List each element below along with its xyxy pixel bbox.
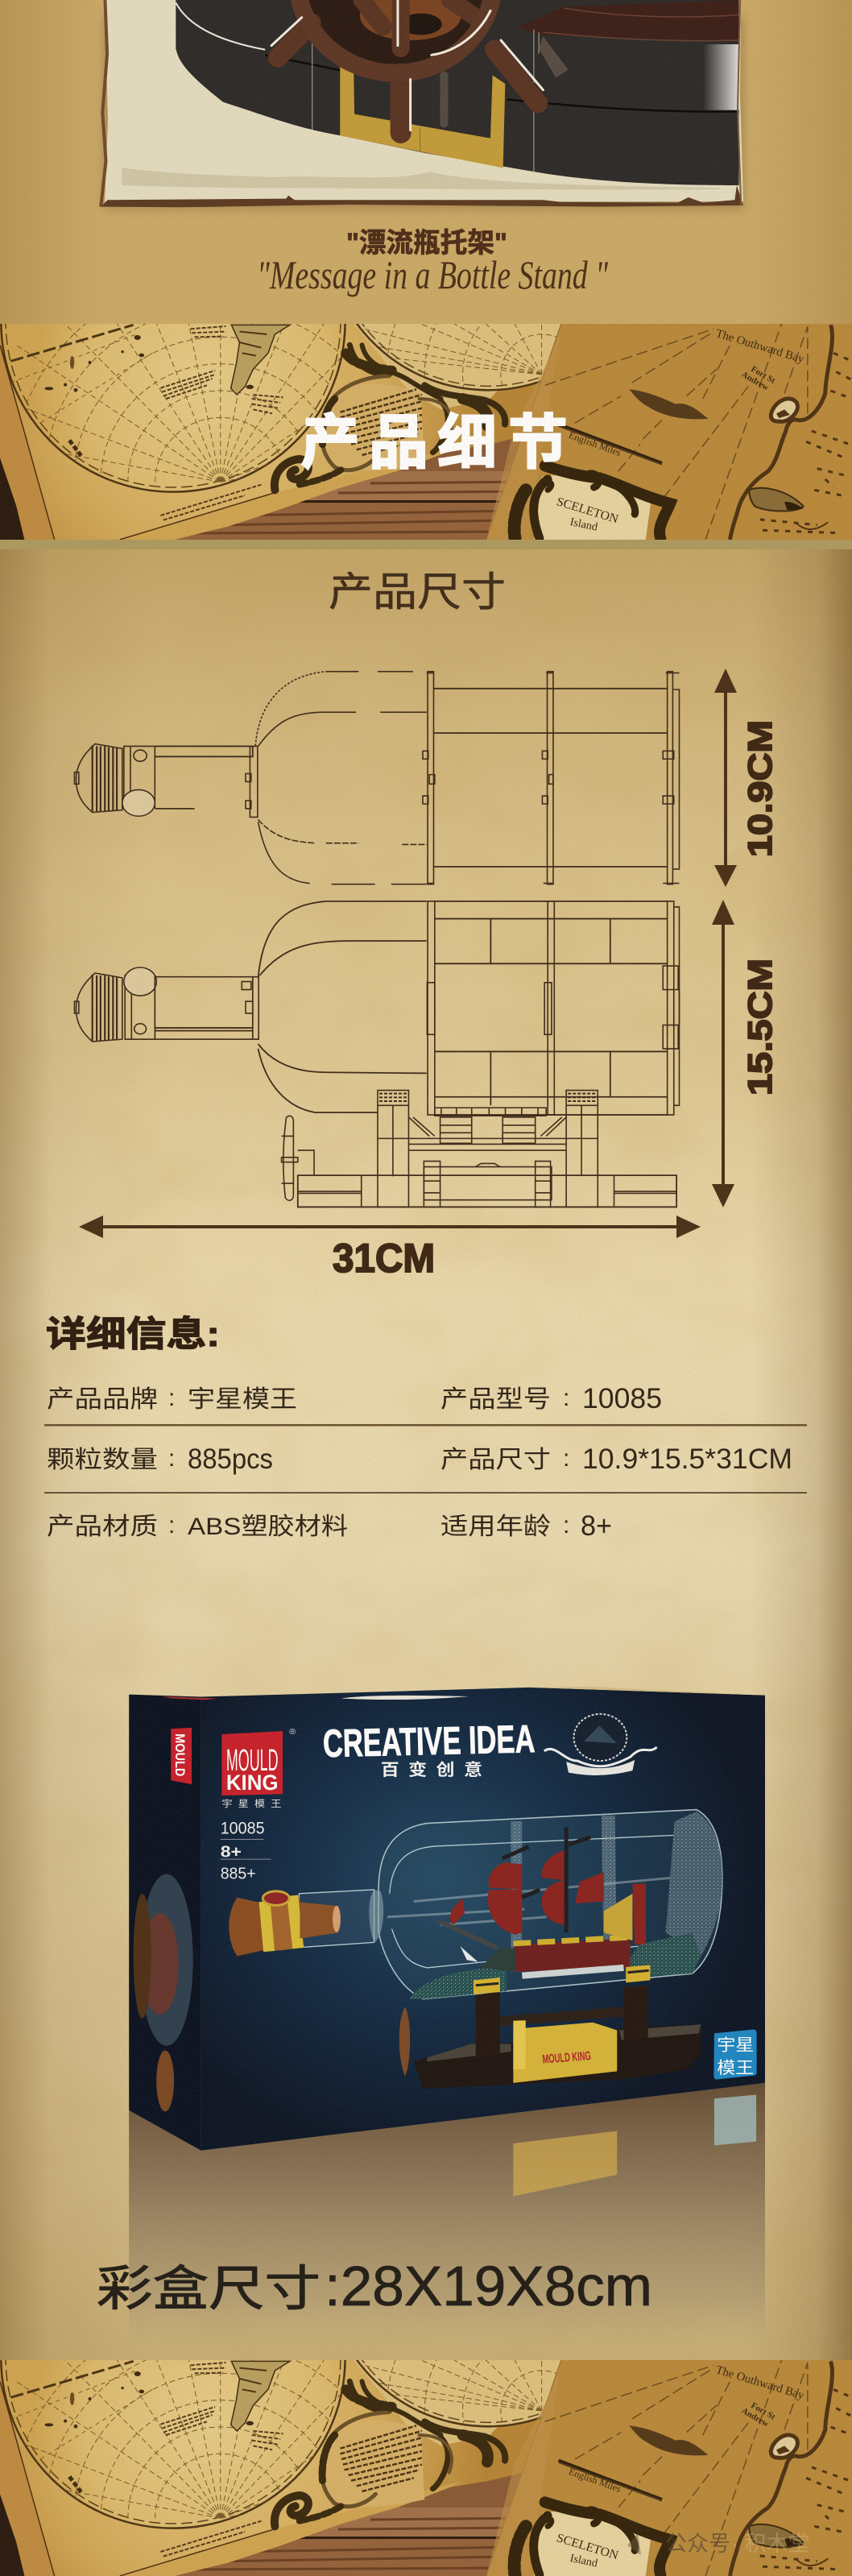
- banner: antique maps with section title: Andrew: [740, 370, 771, 393]
- stand base body: [176, 0, 739, 185]
- section title: 细: [437, 409, 497, 476]
- banner: bottom antique maps: Fort St: [749, 2400, 777, 2422]
- row 1: 产品品牌: [47, 1386, 158, 1413]
- panel: stand illustration paper: [101, 0, 744, 209]
- hull: [513, 1939, 631, 1972]
- caption: Chinese stand name: "漂流瓶托架": [346, 228, 507, 259]
- brand logo: ®: [289, 1729, 296, 1737]
- section title: 节: [508, 409, 568, 476]
- watermark: · 积木堂: [731, 2532, 810, 2556]
- arrow: vertical lower: [712, 900, 734, 1207]
- background: sand side shading: [0, 0, 852, 324]
- heading: detailed information: 详细信息:: [46, 1315, 220, 1354]
- row 1: 10085: [582, 1383, 662, 1414]
- product box photo: [129, 1687, 765, 2352]
- banner: antique maps with section title: Fort St: [749, 364, 777, 386]
- brand tag: [713, 2029, 757, 2080]
- top view of bottle: [74, 672, 680, 884]
- ship wheel: [271, 0, 543, 133]
- bottle stand: [399, 1965, 701, 2089]
- banner: antique maps with section title: [0, 72, 852, 540]
- product specs: 10085: [221, 1818, 265, 1837]
- label: 31CM: 31CM: [333, 1236, 435, 1281]
- section title: 品: [369, 409, 428, 476]
- watermark: [627, 2532, 810, 2556]
- background: parchment edge vignette: [0, 541, 852, 2360]
- row 3: 8+: [581, 1510, 612, 1542]
- background: parchment: [0, 541, 852, 2360]
- banner: bottom antique maps: [0, 2109, 852, 2576]
- row 2: 颗粒数量: [47, 1447, 158, 1473]
- text: color box size: 彩盒尺寸: [97, 2262, 321, 2316]
- row 3: 产品材质: [47, 1514, 158, 1540]
- row 2: :: [563, 1445, 569, 1472]
- section title: 产: [300, 409, 360, 476]
- product specs: 8+: [221, 1842, 242, 1861]
- side view of bottle: [74, 901, 680, 1115]
- row 3: :: [168, 1512, 175, 1539]
- banner: bottom antique maps: The Outhward Bay: [714, 2363, 806, 2402]
- arrow: horizontal: [79, 1216, 701, 1238]
- box side face: [129, 1695, 201, 2151]
- row 2: 10.9*15.5*31CM: [582, 1443, 792, 1475]
- frames: [511, 1816, 617, 1972]
- row 1: :: [563, 1385, 569, 1411]
- row 3: :: [563, 1512, 569, 1539]
- brand logo: KING: [226, 1770, 279, 1795]
- row 1: 宇星模王: [188, 1386, 297, 1413]
- box reflection: [129, 2083, 765, 2352]
- row 3: [47, 1510, 612, 1542]
- box front face: [201, 1688, 765, 2151]
- bottle stand: MOULD KING: [542, 2048, 592, 2066]
- banner: antique maps with section title: English Miles: [567, 429, 622, 458]
- brand logo: 宇 星 模 王: [221, 1798, 281, 1809]
- heading: product size: 产品尺寸: [329, 569, 506, 615]
- product specs: [221, 1818, 271, 1882]
- bottle in box: [229, 1810, 722, 1999]
- banner: bottom antique maps: English Miles: [567, 2466, 622, 2495]
- ship sails: [450, 1851, 646, 1944]
- banner: bottom antique maps: SCELETON: [555, 2531, 620, 2562]
- row 2: 885pcs: [188, 1443, 273, 1475]
- brand logo: MOULD: [226, 1742, 279, 1778]
- row 2: 产品尺寸: [440, 1447, 551, 1473]
- background: sand texture top: [0, 0, 852, 324]
- row 1: [47, 1383, 662, 1414]
- banner: antique maps with section title: Island: [569, 516, 599, 534]
- label: 15.5CM: 15.5CM: [741, 959, 779, 1095]
- watermark: 公众号: [665, 2532, 730, 2556]
- arrow: vertical upper: [714, 669, 737, 887]
- side logo: MOULD: [172, 1733, 187, 1776]
- background: sand strip under top banner: [0, 540, 852, 549]
- row 1: 产品型号: [440, 1386, 551, 1413]
- chart: bottle technical drawing: [74, 672, 680, 1207]
- paper outline: [101, 185, 743, 207]
- row 1: :: [168, 1385, 175, 1411]
- row 3: ABS塑胶材料: [188, 1514, 348, 1540]
- title CREATIVE IDEA: CREATIVE IDEA: [322, 1717, 536, 1765]
- banner: antique maps with section title: The Outhward Bay: [714, 327, 806, 366]
- table: product information: [44, 1383, 807, 1542]
- banner: antique maps with section title: SCELETON: [555, 495, 620, 526]
- brand logo: [221, 1729, 296, 1809]
- background: parchment blotches: [0, 541, 852, 2360]
- product specs: 885+: [221, 1864, 256, 1882]
- brand tag: 宇星: [717, 2036, 754, 2054]
- row 2: :: [168, 1445, 175, 1472]
- gold frame: [340, 55, 505, 168]
- text: color box size: :28X19X8cm: [325, 2255, 652, 2317]
- badge: [544, 1714, 657, 1775]
- brand tag: 模王: [717, 2058, 754, 2077]
- speckled glass end: [666, 1812, 722, 1956]
- cork: [229, 1898, 263, 1956]
- label: 10.9CM: 10.9CM: [741, 720, 779, 857]
- title Chinese: 百变创意: [381, 1760, 482, 1779]
- banner: bottom antique maps: Andrew: [740, 2406, 771, 2429]
- banner: bottom antique maps: Island: [569, 2552, 599, 2570]
- side logo: [171, 1728, 192, 1784]
- text: color box size: [97, 2255, 652, 2317]
- row 3: 适用年龄: [440, 1514, 551, 1540]
- caption: English stand name: "Message in a Bottle Stand ": [257, 252, 609, 297]
- water: [409, 1968, 507, 1999]
- row 2: [47, 1443, 792, 1475]
- display stand: [282, 1091, 676, 1207]
- side face graphic: [134, 1874, 193, 2111]
